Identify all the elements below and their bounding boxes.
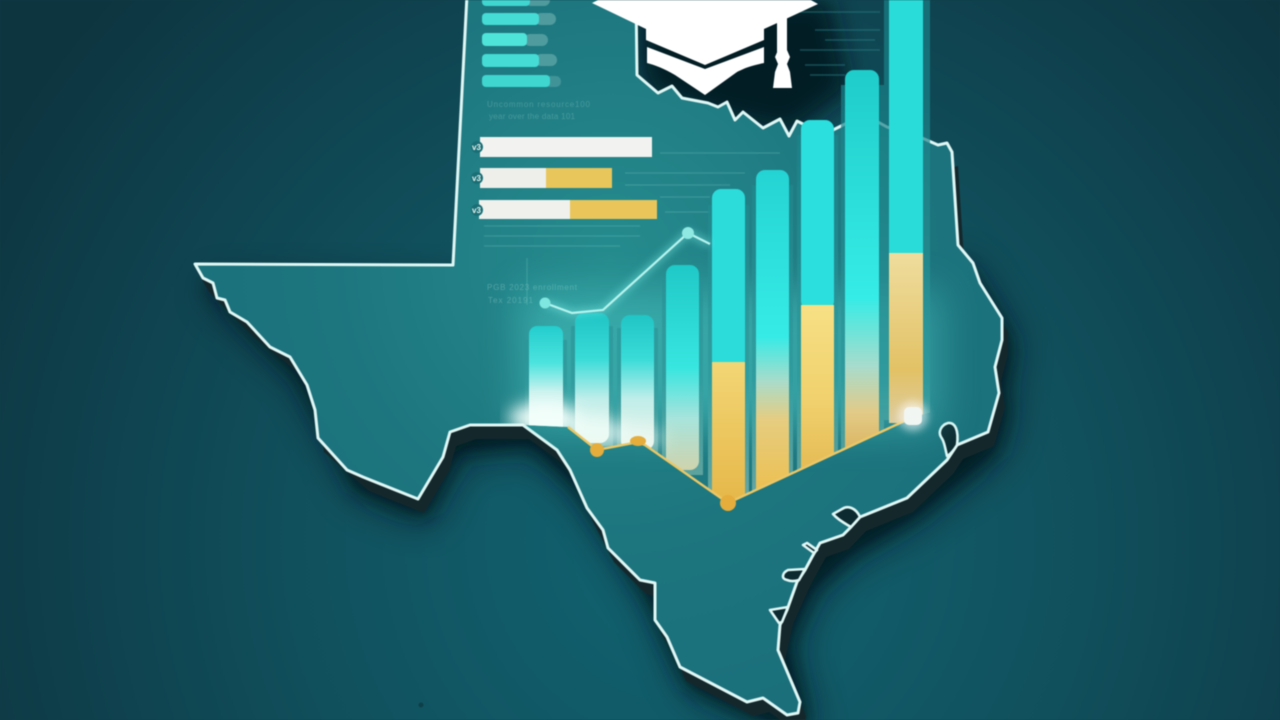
icon: graduation cap (592, 0, 818, 95)
faint chart caption: Tex 20191 (488, 296, 534, 305)
gold line series (568, 417, 913, 511)
bar 6 (756, 170, 789, 500)
faint chart caption: PGB 2023 enrollment (487, 283, 578, 292)
teal line series (540, 227, 710, 313)
bar 2 (575, 313, 609, 443)
upper-left dashboard panel (471, 0, 780, 305)
faint caption text: year over the data 101 (489, 112, 576, 121)
bar row labels: v3 (472, 143, 481, 152)
bar 8 (845, 70, 879, 455)
white glowing end point (898, 401, 928, 431)
teal progress bars (482, 0, 561, 87)
bar 3 (621, 315, 654, 450)
bar row labels (471, 141, 483, 216)
cap band (647, 47, 764, 95)
faint grid lines (484, 153, 780, 305)
bar row labels: v3 (472, 174, 481, 183)
Texas map: tight drop shadow (203, 265, 1010, 720)
faint chart caption (487, 283, 578, 305)
Texas map: state outline (195, 0, 1002, 715)
bar chart glow (520, 290, 940, 430)
bar 9 (889, 0, 923, 423)
bar backing strips (525, 0, 930, 505)
Texas map: wide drop shadow (205, 267, 1012, 720)
faint speck at bottom (418, 702, 424, 708)
Texas map: extruded edge (201, 166, 1008, 720)
bar 5 (712, 189, 745, 507)
bar 7 (801, 120, 834, 475)
faint caption text (487, 100, 591, 121)
tassel (773, 14, 792, 88)
bar chart (509, 0, 930, 507)
white fog at chart base (509, 402, 666, 450)
mortarboard (592, 0, 818, 65)
faint caption text: Uncommon resource100 (487, 100, 591, 109)
coastal bays and islands (770, 423, 958, 623)
faint lines outside the map (800, 12, 880, 75)
horizontal white and gold bars (479, 137, 657, 219)
bar row labels: v3 (472, 206, 481, 215)
bar 4 (666, 265, 699, 470)
dark cap shadow outside panhandle (640, 0, 850, 135)
bar 1 (529, 326, 563, 436)
